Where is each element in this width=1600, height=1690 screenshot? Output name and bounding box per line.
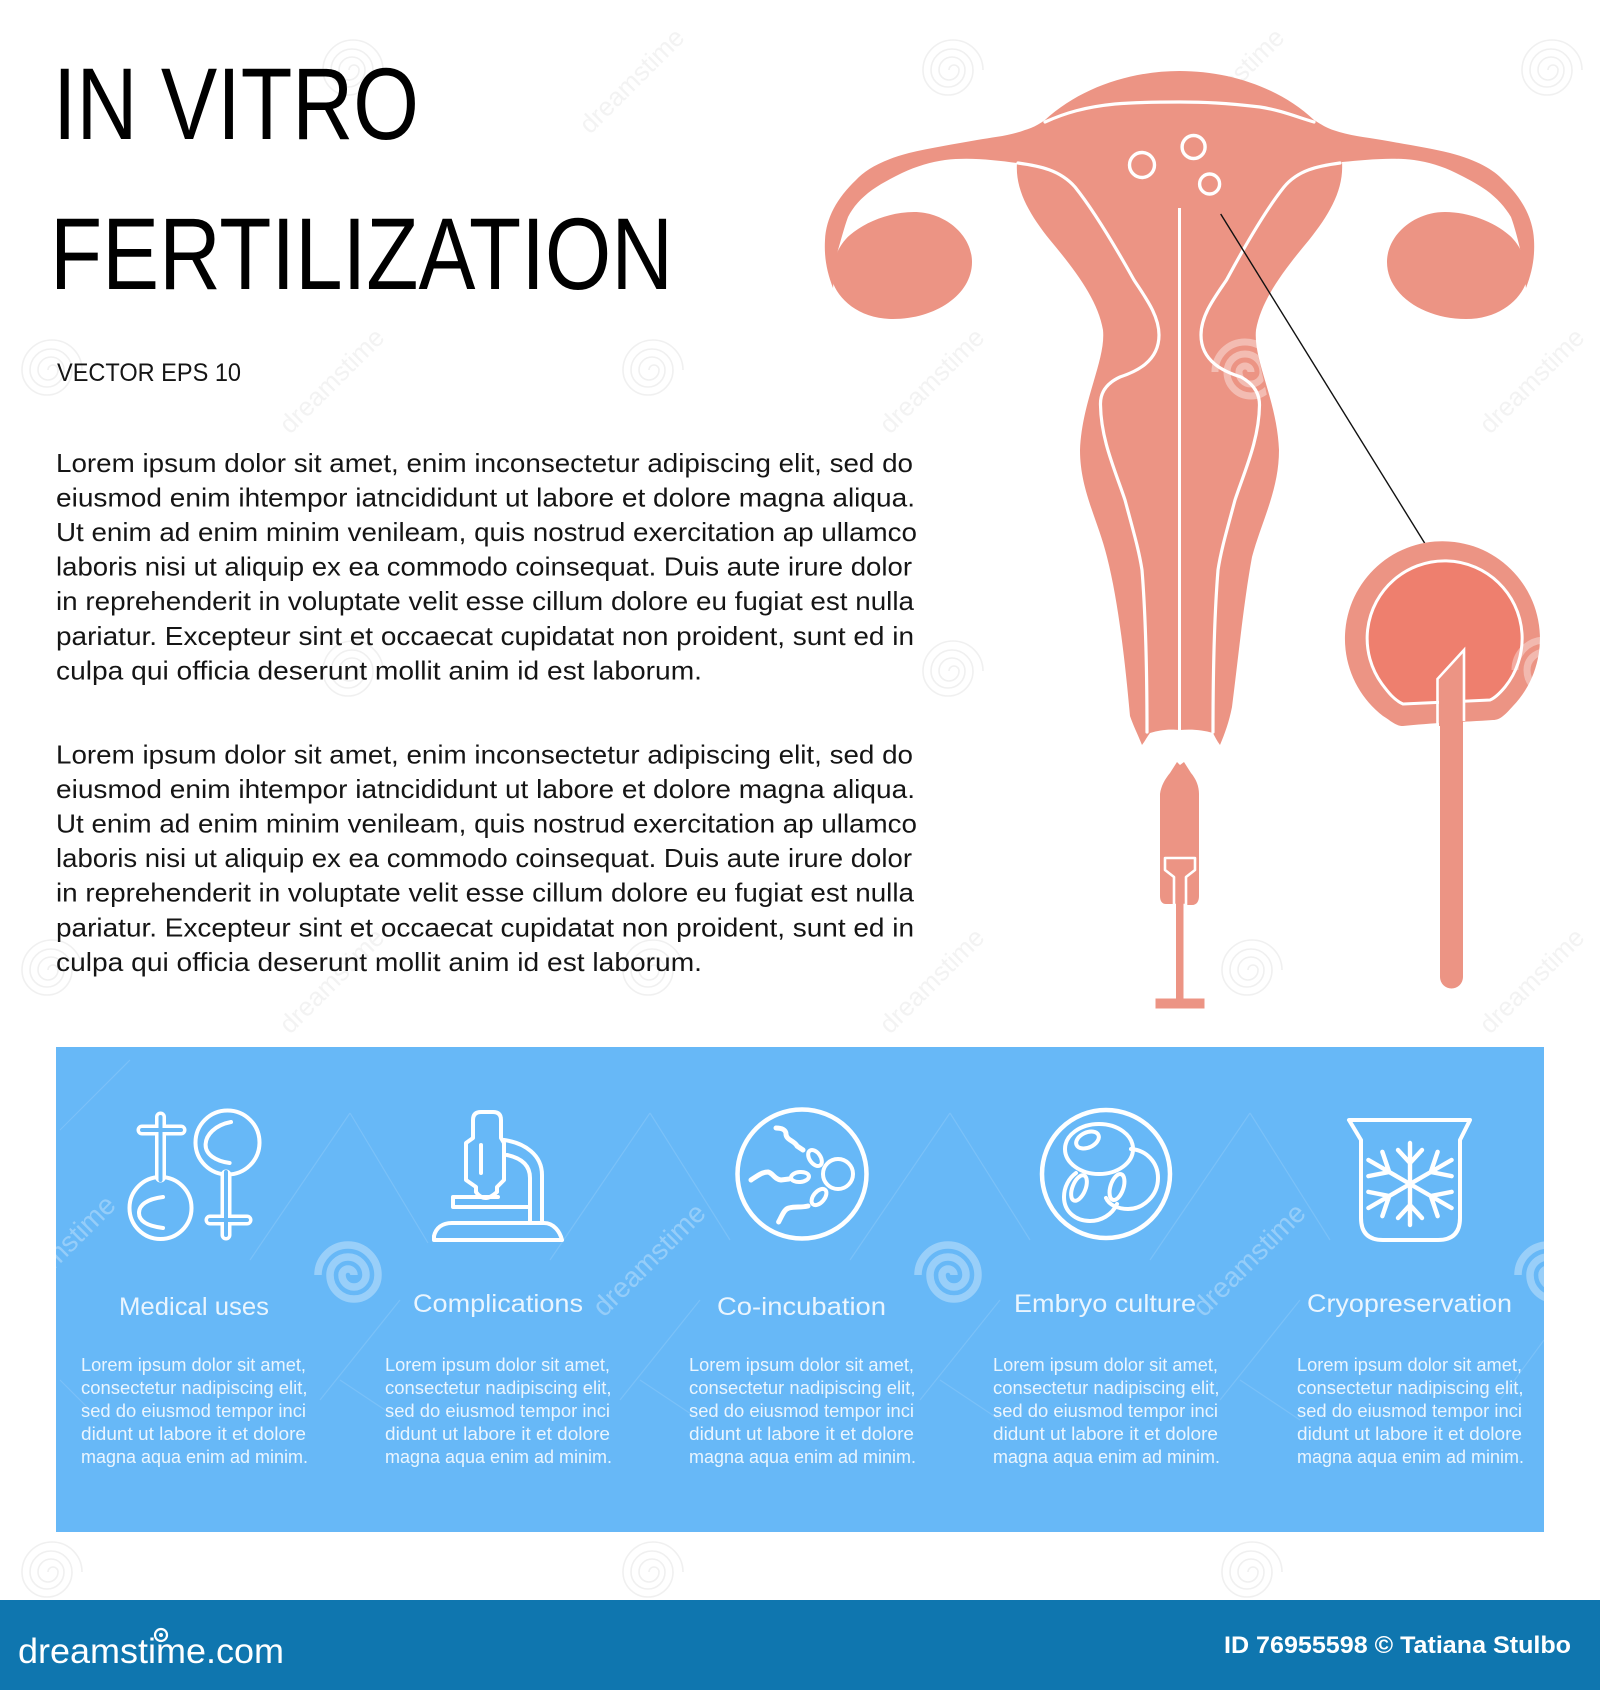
description: consectetur nadipiscing elit,: [993, 1378, 1220, 1398]
description: magna aqua enim ad minim.: [385, 1447, 612, 1467]
description: Lorem ipsum dolor sit amet,: [1297, 1355, 1522, 1375]
description: didunt ut labore it et dolore: [81, 1424, 306, 1444]
heading: Complications: [413, 1290, 583, 1318]
faint watermark on white: dreamstime: [1473, 922, 1590, 1039]
column: complications: [385, 1112, 612, 1467]
pointer line: [1221, 214, 1428, 548]
faint watermark on white: dreamstime: [273, 322, 390, 439]
uterus inner white outlines: [1018, 102, 1340, 732]
text block: paragraph one: [56, 448, 917, 686]
description: [385, 1355, 612, 1467]
description: consectetur nadipiscing elit,: [1297, 1378, 1524, 1398]
magnified view: catheter in uterus: [1345, 541, 1540, 988]
panel: steps: [0, 1047, 1578, 1532]
panel: steps: dreamstime: [1186, 1197, 1312, 1322]
text block: paragraph one: eiusmod enim ihtempor iatncididunt ut labore et dolore magna aliqua.: [56, 482, 915, 512]
icon: sperm and egg: [738, 1110, 866, 1238]
faint watermark on white: dreamstime: [873, 322, 990, 439]
logo: dreamstime: dreamstime.com: [18, 1632, 284, 1671]
description: magna aqua enim ad minim.: [689, 1447, 916, 1467]
description: consectetur nadipiscing elit,: [689, 1378, 916, 1398]
description: magna aqua enim ad minim.: [81, 1447, 308, 1467]
text block: paragraph two: laboris nisi ut aliquip ex ea commodo coinsequat. Duis aute irure dolor: [56, 843, 912, 873]
icon: embryos: [1130, 136, 1220, 194]
column: embryo culture: [993, 1110, 1220, 1467]
catheter syringe: [1156, 762, 1204, 1008]
description: sed do eiusmod tempor inci: [385, 1401, 610, 1421]
description: magna aqua enim ad minim.: [993, 1447, 1220, 1467]
heading: Cryopreservation: [1307, 1290, 1512, 1318]
icon: right ovary: [1387, 212, 1527, 319]
icon: microscope: [434, 1112, 562, 1240]
uterus body and tubes: [825, 71, 1534, 745]
heading: Embryo culture: [1014, 1290, 1196, 1318]
icon: beaker with snowflake: [1349, 1120, 1470, 1240]
footer bar: [0, 1600, 1600, 1690]
description: consectetur nadipiscing elit,: [385, 1378, 612, 1398]
description: sed do eiusmod tempor inci: [81, 1401, 306, 1421]
description: Lorem ipsum dolor sit amet,: [689, 1355, 914, 1375]
description: didunt ut labore it et dolore: [1297, 1424, 1522, 1444]
text block: paragraph two: culpa qui officia deserunt mollit anim id est laborum.: [56, 947, 702, 977]
text block: paragraph one: pariatur. Excepteur sint et occaecat cupidatat non proident, sunt ed in: [56, 621, 914, 651]
text block: paragraph two: Lorem ipsum dolor sit amet, enim inconsectetur adipiscing elit, sed do: [56, 739, 913, 769]
description: Lorem ipsum dolor sit amet,: [385, 1355, 610, 1375]
icon: embryo cells: [1042, 1110, 1170, 1238]
description: [81, 1355, 308, 1467]
text block: paragraph two: eiusmod enim ihtempor iatncididunt ut labore et dolore magna aliqua.: [56, 774, 915, 804]
text block: paragraph one: culpa qui officia deserunt mollit anim id est laborum.: [56, 656, 702, 686]
heading: Co-incubation: [717, 1293, 886, 1321]
column: medical uses: [81, 1110, 308, 1467]
faint watermark on white: dreamstime: [1473, 322, 1590, 439]
text block: paragraph one: Ut enim ad enim minim venileam, quis nostrud exercitation ap ullamco: [56, 517, 917, 547]
icon: gender symbols: [130, 1110, 260, 1239]
text block: paragraph one: in reprehenderit in voluptate velit esse cillum dolore eu fugiat est nulla: [56, 586, 915, 616]
column: cryopreservation: [1297, 1120, 1524, 1467]
image id and credit: ID 76955598 © Tatiana Stulbo: [1224, 1632, 1571, 1659]
text block: paragraph one: Lorem ipsum dolor sit amet, enim inconsectetur adipiscing elit, sed do: [56, 448, 913, 478]
description: [993, 1355, 1220, 1467]
uterus anatomy diagram: [825, 71, 1534, 745]
faint watermark on white: dreamstime: [1173, 22, 1290, 139]
description: sed do eiusmod tempor inci: [993, 1401, 1218, 1421]
icon: left ovary: [832, 212, 972, 319]
faint watermark on white: dreamstime: [273, 922, 390, 1039]
text block: paragraph two: in reprehenderit in voluptate velit esse cillum dolore eu fugiat est nulla: [56, 877, 915, 907]
text block: paragraph one: laboris nisi ut aliquip ex ea commodo coinsequat. Duis aute irure dolor: [56, 552, 912, 582]
description: sed do eiusmod tempor inci: [1297, 1401, 1522, 1421]
text block: paragraph two: [56, 739, 917, 977]
heading: Medical uses: [119, 1293, 269, 1321]
subtitle: VECTOR EPS 10: [57, 359, 241, 387]
column: co-incubation: [689, 1110, 916, 1467]
title: IN VITRO: [53, 47, 419, 161]
description: Lorem ipsum dolor sit amet,: [81, 1355, 306, 1375]
faint watermark on white: dreamstime: [573, 22, 690, 139]
panel: steps: dreamstime: [0, 1189, 122, 1314]
centre canal line: [1178, 208, 1181, 731]
description: magna aqua enim ad minim.: [1297, 1447, 1524, 1467]
panel: steps: dreamstime: [586, 1197, 712, 1322]
description: Lorem ipsum dolor sit amet,: [993, 1355, 1218, 1375]
title: FERTILIZATION: [50, 197, 673, 311]
description: [689, 1355, 916, 1467]
faint watermark on white: dreamstime: [873, 922, 990, 1039]
text block: paragraph two: pariatur. Excepteur sint et occaecat cupidatat non proident, sunt ed in: [56, 912, 914, 942]
description: didunt ut labore it et dolore: [689, 1424, 914, 1444]
description: consectetur nadipiscing elit,: [81, 1378, 308, 1398]
description: [1297, 1355, 1524, 1467]
text block: paragraph two: Ut enim ad enim minim venileam, quis nostrud exercitation ap ullamco: [56, 808, 917, 838]
pale watermark spirals on pink: [1215, 342, 1275, 396]
description: sed do eiusmod tempor inci: [689, 1401, 914, 1421]
description: didunt ut labore it et dolore: [993, 1424, 1218, 1444]
title: [50, 47, 673, 311]
description: didunt ut labore it et dolore: [385, 1424, 610, 1444]
pale watermark spiral over magnified view: [1512, 637, 1540, 685]
